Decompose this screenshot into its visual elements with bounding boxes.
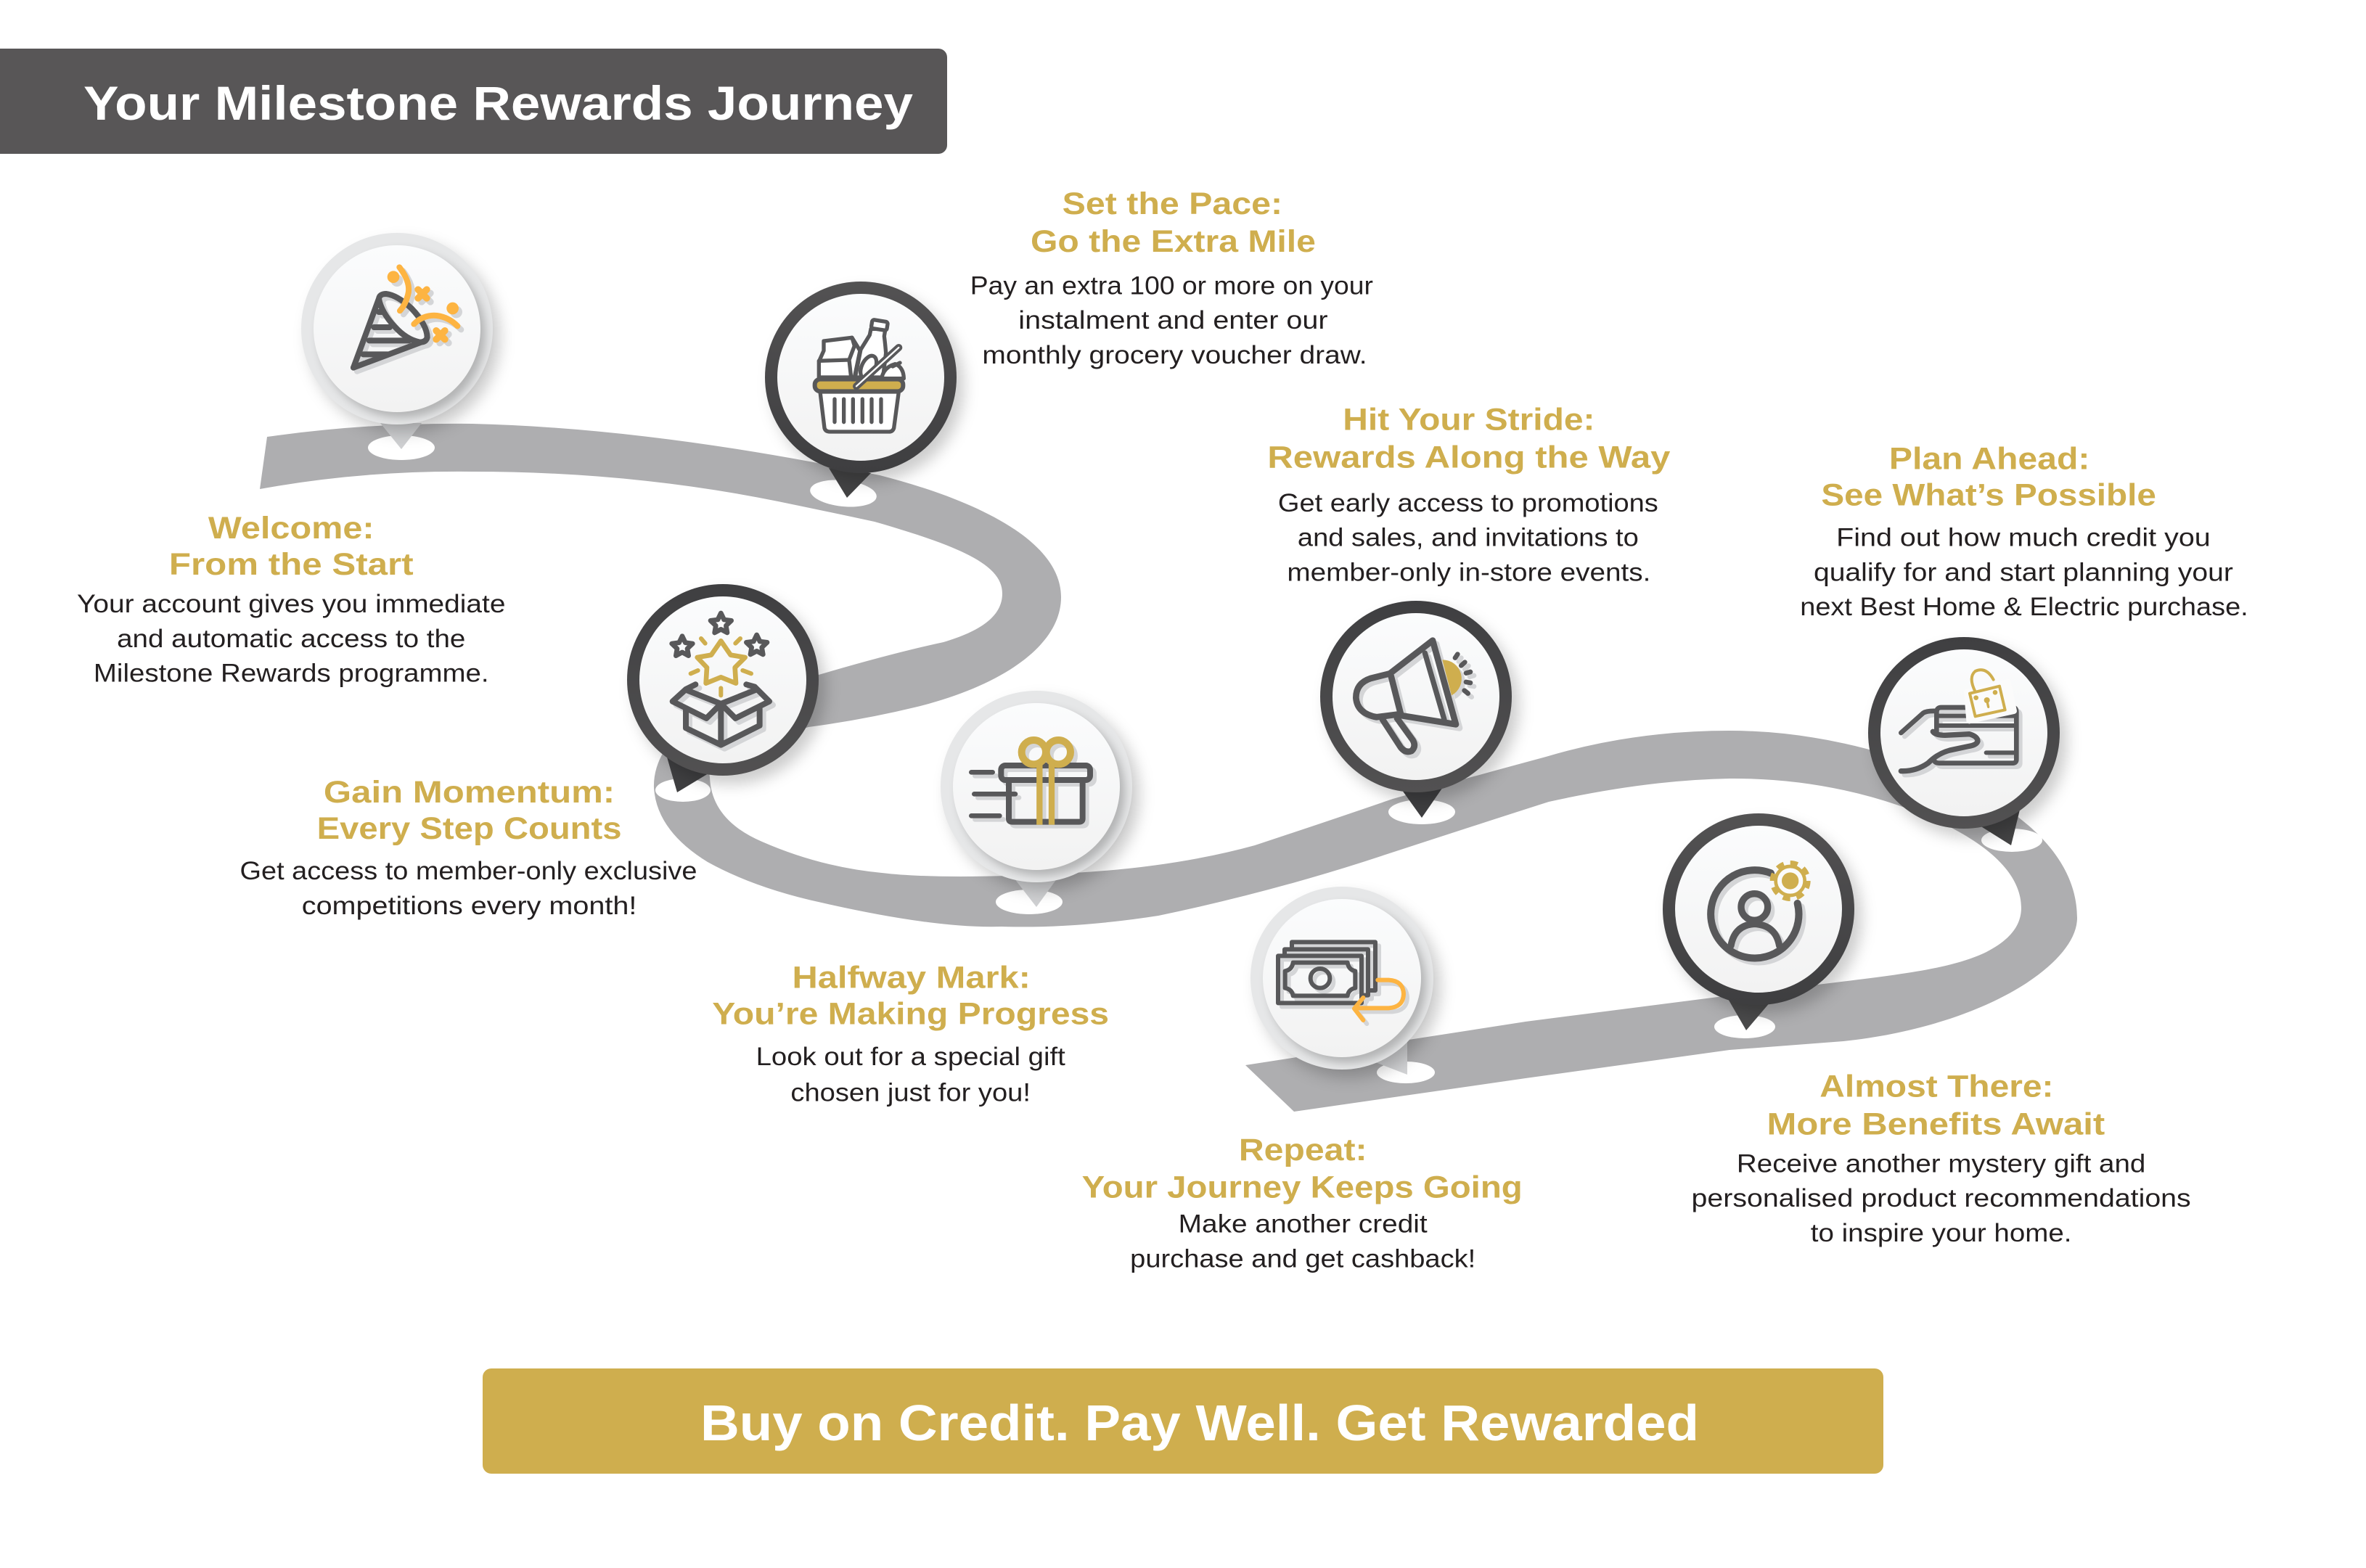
text: hit your stride: Hit Your Stride: (1343, 403, 1595, 438)
text: welcome: Milestone Rewards programme. (94, 660, 489, 688)
text: halfway mark: chosen just for you! (790, 1079, 1031, 1107)
text: set the pace: Pay an extra 100 or more on your (970, 271, 1373, 300)
title banner: Your Milestone Rewards Journey (83, 76, 913, 130)
icon: hand holding card (1901, 707, 2016, 771)
text: almost there: personalised product recommendations (1692, 1184, 2191, 1212)
text: plan ahead: qualify for and start planning your (1814, 558, 2233, 586)
text: set the pace: Go the Extra Mile (1031, 224, 1316, 259)
text: repeat: Your Journey Keeps Going (1082, 1170, 1523, 1205)
text: welcome (77, 511, 505, 688)
text: repeat: Repeat: (1239, 1133, 1367, 1167)
text: repeat: Make another credit (1179, 1210, 1428, 1239)
icon: party popper (353, 267, 459, 368)
text: halfway mark: Look out for a special gift (756, 1043, 1065, 1071)
text: repeat: purchase and get cashback! (1130, 1244, 1475, 1273)
text: hit your stride (1267, 403, 1671, 586)
icon: gift box (971, 740, 1090, 825)
call-to-action banner: Buy on Credit. Pay Well. Get Rewarded (700, 1395, 1699, 1451)
text: welcome: From the Start (169, 547, 414, 582)
text: hit your stride: and sales, and invitations to (1298, 524, 1639, 552)
text: welcome: Your account gives you immediate (77, 590, 505, 618)
text: gain momentum (240, 775, 697, 920)
text: almost there: Receive another mystery gift and (1737, 1149, 2145, 1178)
text: almost there: Almost There: (1819, 1069, 2054, 1104)
text: gain momentum: Every Step Counts (317, 811, 622, 846)
text: plan ahead: See What’s Possible (1821, 477, 2156, 512)
text: set the pace (970, 186, 1373, 369)
icon: stars (672, 613, 767, 695)
text: halfway mark (712, 961, 1109, 1107)
text: plan ahead: next Best Home & Electric purchase. (1800, 593, 2248, 621)
pin 4: halfway mark (941, 691, 1132, 914)
pin 8: plan ahead (1868, 637, 2060, 852)
text: almost there (1692, 1069, 2191, 1247)
icon: open padlock (1967, 670, 2014, 721)
text: gain momentum: competitions every month! (302, 892, 636, 920)
text: gain momentum: Gain Momentum: (324, 775, 615, 810)
text: almost there: to inspire your home. (1811, 1219, 2071, 1247)
text: plan ahead: Plan Ahead: (1889, 442, 2089, 477)
text: welcome: and automatic access to the (117, 625, 465, 653)
pin 6: repeat (1250, 887, 1435, 1083)
title banner (0, 49, 947, 154)
text: halfway mark: You’re Making Progress (712, 997, 1109, 1032)
icon: user with gear (1711, 870, 1798, 958)
text: set the pace: monthly grocery voucher draw. (982, 341, 1367, 369)
text: almost there: More Benefits Await (1767, 1107, 2105, 1141)
text: hit your stride: Get early access to promotions (1278, 489, 1658, 517)
text: set the pace: instalment and enter our (1018, 306, 1328, 334)
text: hit your stride: member-only in-store events. (1287, 558, 1650, 586)
call-to-action banner (483, 1368, 1883, 1474)
winding road path (260, 424, 2077, 1112)
pin 7: almost there (1663, 813, 1854, 1038)
icon: gear (1773, 863, 1808, 898)
text: set the pace: Set the Pace: (1063, 186, 1282, 221)
icon: banknotes with return arrow (1278, 942, 1404, 1020)
text: gain momentum: Get access to member-only exclusive (240, 857, 697, 885)
icon: open box with stars (673, 684, 769, 745)
text: repeat (1082, 1133, 1523, 1273)
text: hit your stride: Rewards Along the Way (1267, 440, 1671, 475)
text: halfway mark: Halfway Mark: (792, 961, 1031, 996)
pin 2: set the pace (765, 282, 957, 510)
text: plan ahead: Find out how much credit you (1836, 524, 2211, 552)
text: plan ahead (1800, 442, 2248, 621)
icon: megaphone (1356, 641, 1470, 752)
text: welcome: Welcome: (208, 511, 374, 546)
pin 3: gain momentum (627, 584, 819, 802)
icon: grocery basket (815, 319, 904, 432)
pin 1: welcome (301, 233, 493, 460)
pin 5: hit your stride (1320, 601, 1512, 824)
